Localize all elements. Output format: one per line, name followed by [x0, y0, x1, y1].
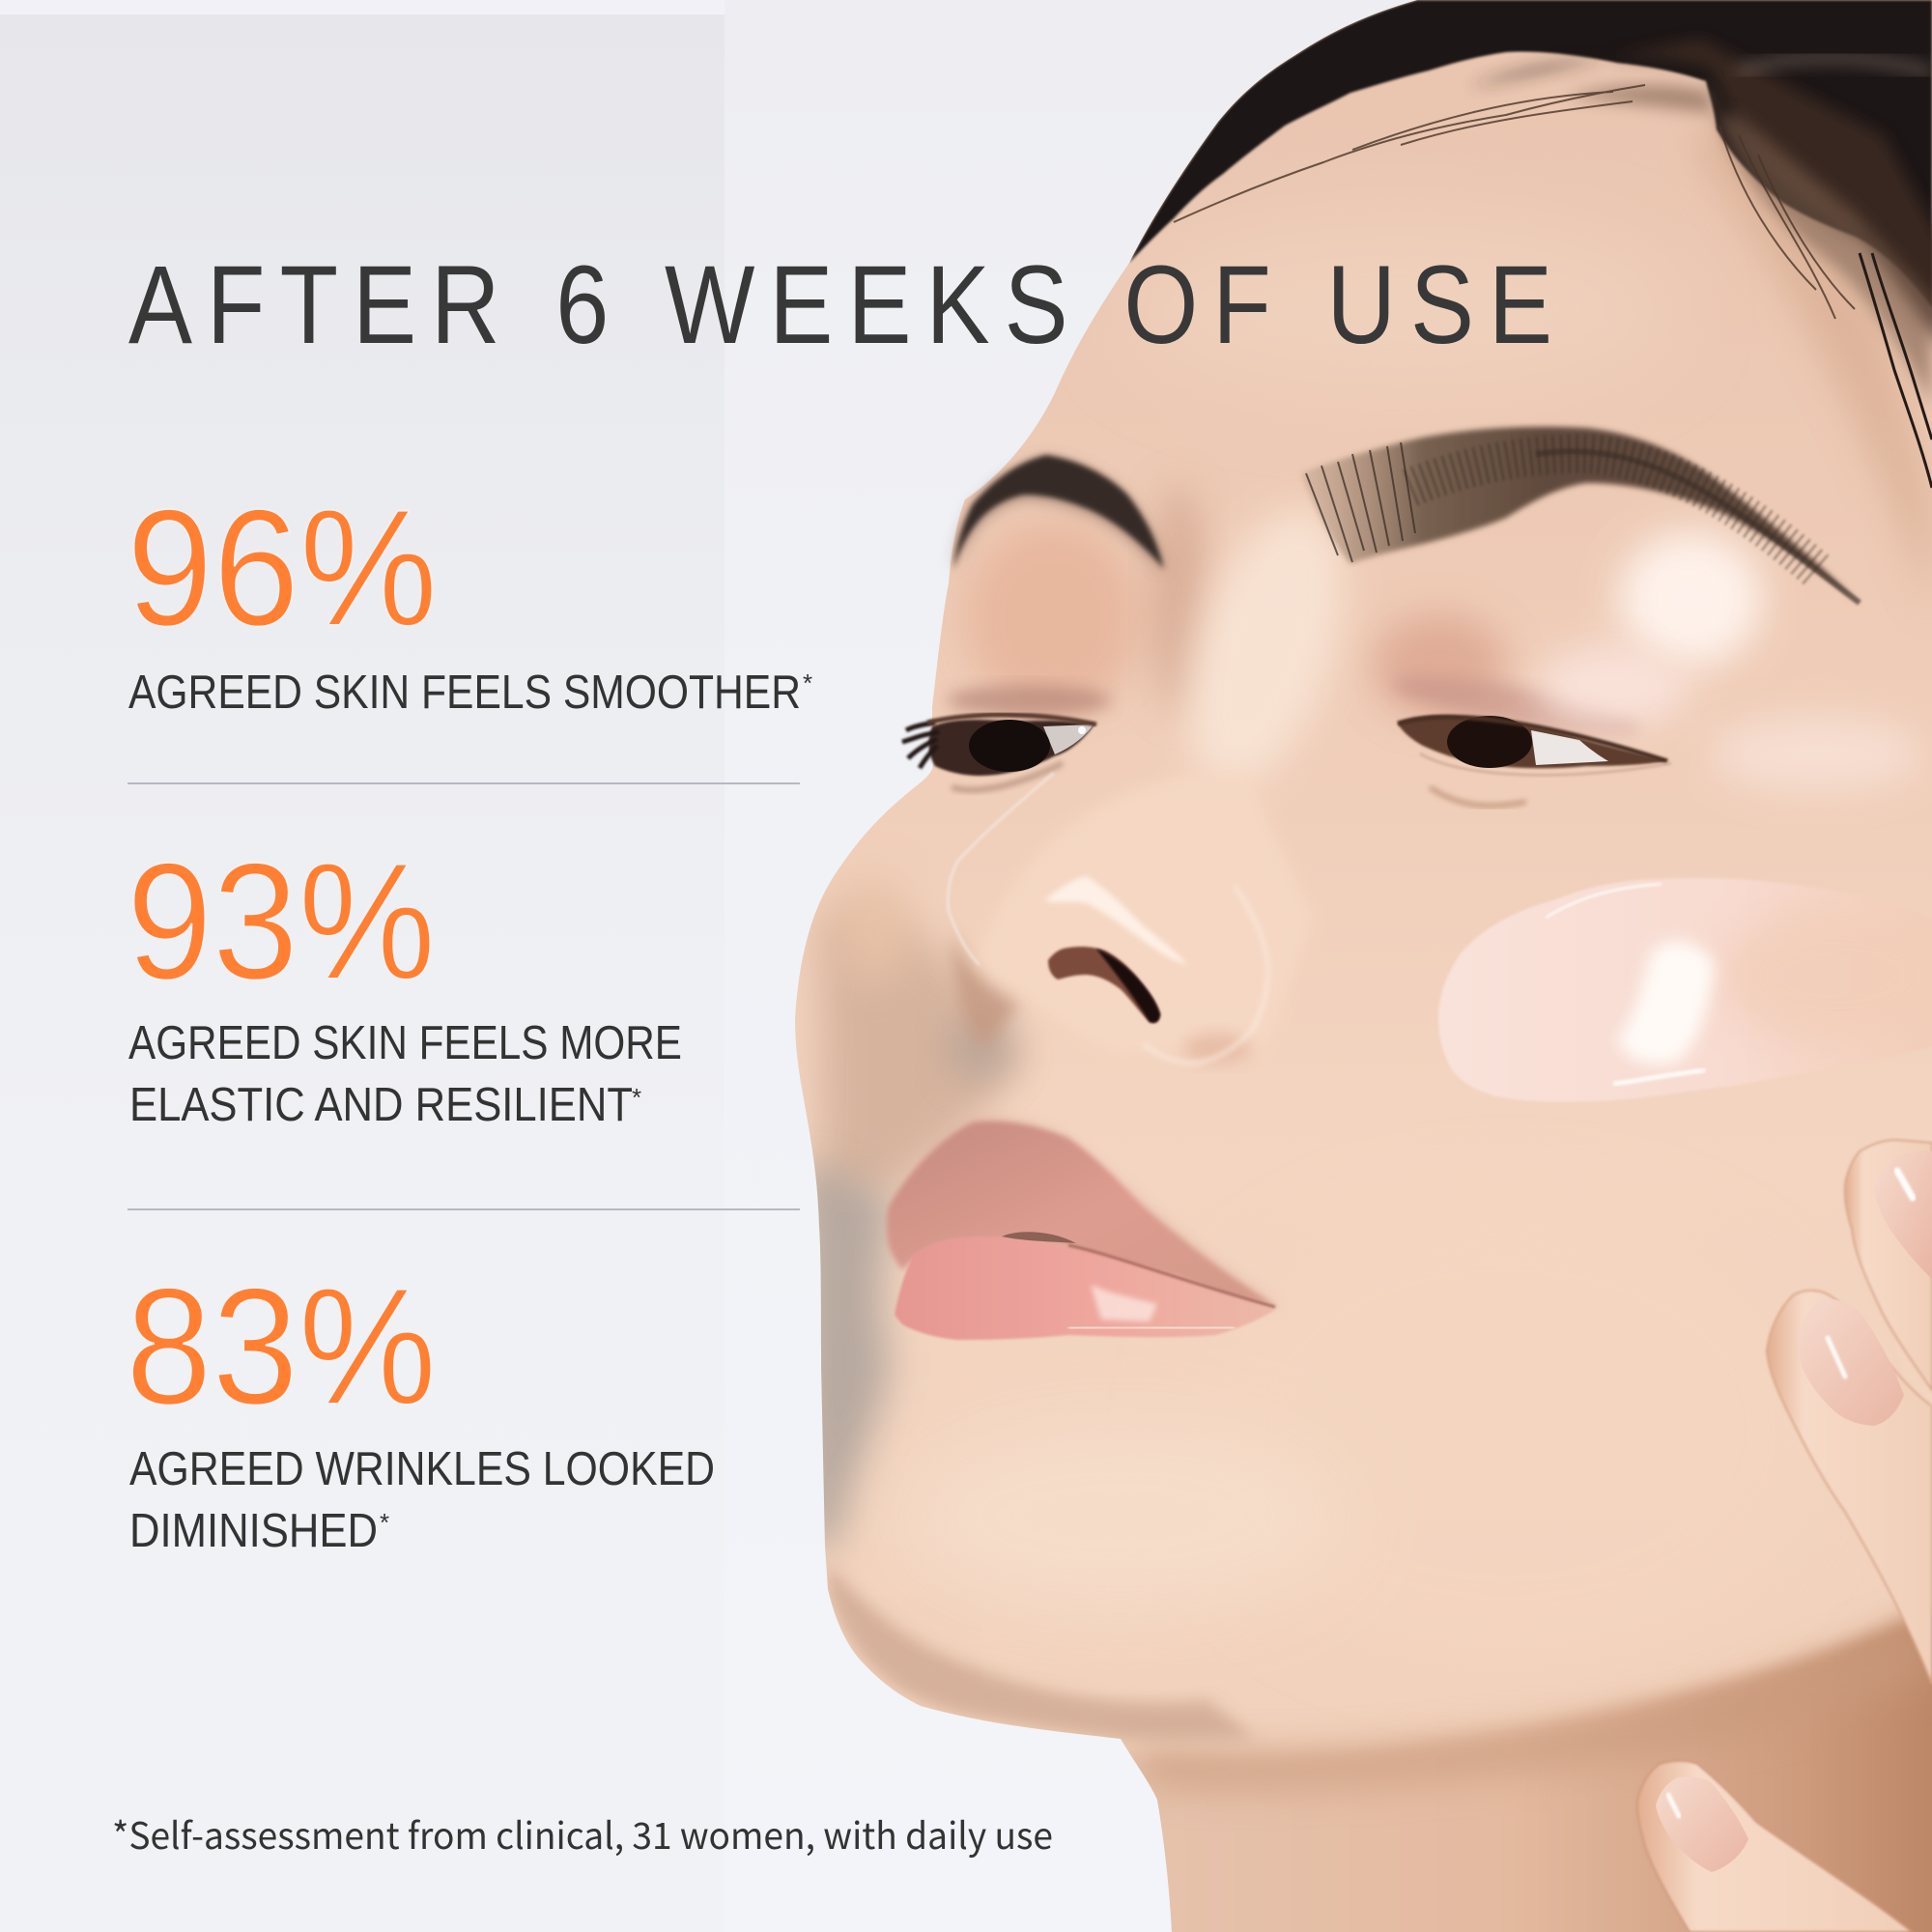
- nose outline: [948, 773, 1054, 965]
- right eye: [1398, 716, 1671, 806]
- grey shadow along the mouth side: [802, 1159, 894, 1546]
- grey patch under nose: [948, 1013, 1013, 1083]
- upper lip: [887, 1122, 1279, 1307]
- description: AGREED SKIN FEELS MORE: [128, 1017, 682, 1069]
- nose bridge light: [1173, 500, 1354, 782]
- footnote: *Self-assessment from clinical, 31 women, with daily use: [112, 1806, 1053, 1860]
- top finger: [1845, 1140, 1932, 1390]
- lower lip: [895, 1237, 1275, 1340]
- description: AGREED SKIN FEELS SMOOTHER: [128, 667, 801, 719]
- neck: [1128, 1613, 1932, 1932]
- photo: woman's face with cream: [773, 0, 1932, 1932]
- hair fringe: [1468, 39, 1932, 348]
- left cheek: [844, 879, 901, 978]
- cream swatch: [1438, 878, 1932, 1102]
- brow hairs: [1410, 454, 1816, 570]
- lip line: [1068, 1245, 1275, 1307]
- forehead glow: [1231, 258, 1577, 342]
- hair sheen: [1739, 58, 1932, 72]
- value: 96%: [127, 475, 438, 661]
- divider: [128, 1208, 800, 1210]
- lower finger: [1637, 1761, 1912, 1932]
- lip gloss: [1091, 1285, 1157, 1321]
- brown cheek shadow below the nose: [821, 908, 1024, 1198]
- alar crease highlight: [1143, 886, 1268, 1064]
- asterisk: *: [632, 1083, 641, 1112]
- fingers and nails: [1637, 1140, 1932, 1932]
- title: AFTER 6 WEEKS OF USE: [128, 242, 1552, 367]
- right hair shadow: [1694, 126, 1932, 572]
- asterisk: *: [803, 668, 812, 697]
- eye sockets: [966, 522, 1140, 715]
- stat: 96%: [127, 475, 812, 719]
- mouth gap: [1002, 1232, 1076, 1243]
- asterisk: *: [380, 1508, 389, 1537]
- cream highlight: [1618, 941, 1715, 1065]
- stat: 93%: [127, 829, 682, 1131]
- skin and neck: [773, 0, 1932, 1932]
- description: DIMINISHED: [129, 1505, 378, 1557]
- solid hair: [1129, 0, 1932, 307]
- stat: 83%: [126, 1254, 715, 1557]
- nostril: [1048, 947, 1160, 1023]
- nose details: [948, 773, 1268, 1064]
- lashes: [902, 723, 939, 768]
- description: ELASTIC AND RESILIENT: [129, 1079, 633, 1131]
- value: 83%: [126, 1254, 437, 1439]
- value: 93%: [127, 829, 436, 1014]
- description: AGREED WRINKLES LOOKED: [129, 1443, 715, 1495]
- lips: [887, 1121, 1279, 1340]
- nose underside shadow: [952, 927, 1019, 1048]
- nose gloss: [1044, 876, 1188, 965]
- chin lower: [828, 1565, 1256, 1739]
- middle finger: [1767, 1291, 1932, 1684]
- divider: [128, 782, 800, 784]
- upper lip halo: [898, 1121, 1279, 1307]
- loose hair strands: [1174, 85, 1855, 319]
- right eyebrow: [1301, 427, 1860, 603]
- jaw shadow: [1130, 1608, 1932, 1788]
- hair: [1129, 0, 1932, 488]
- left eye: [902, 715, 1096, 790]
- left eyebrow: [953, 455, 1164, 573]
- brow-bone and eyelid glow: [1618, 531, 1763, 667]
